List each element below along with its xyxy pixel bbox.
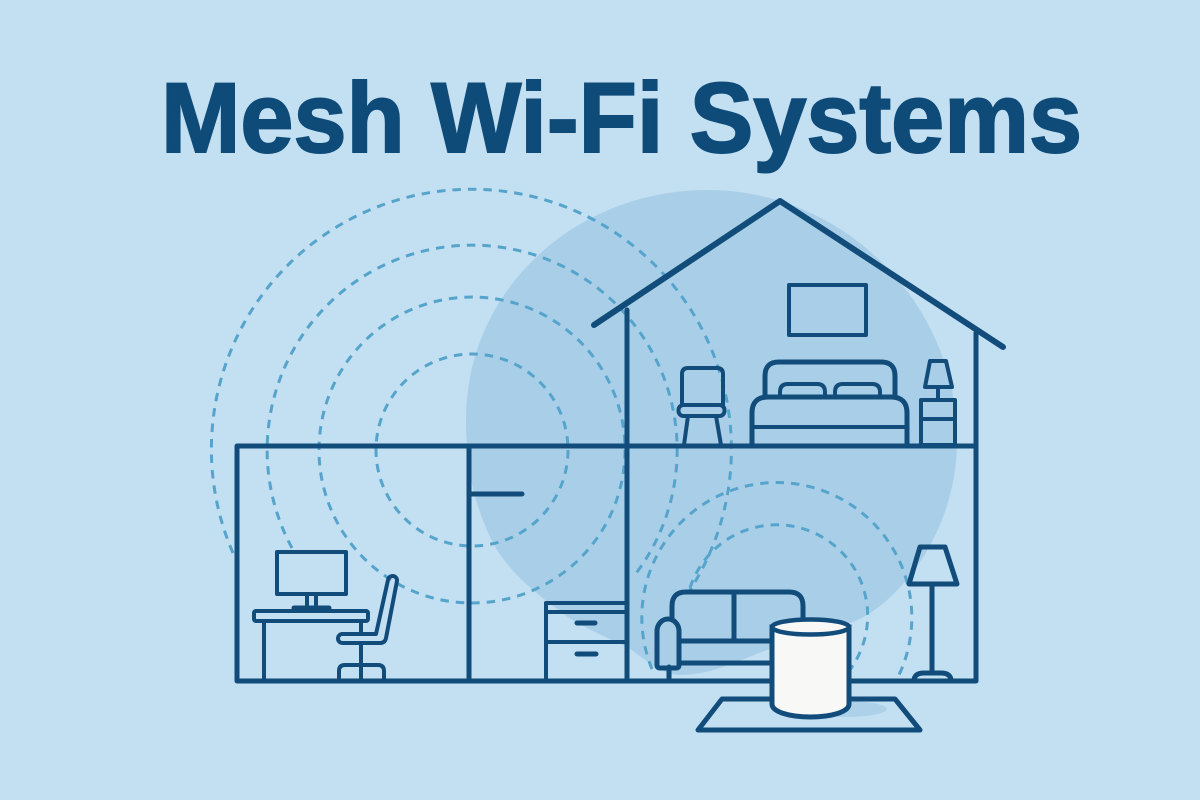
office chair bbox=[338, 576, 397, 681]
signal rings: upstairs left bbox=[211, 189, 731, 603]
bed bbox=[752, 362, 907, 445]
desk with monitor bbox=[254, 552, 368, 681]
mesh router bbox=[772, 620, 849, 717]
signal rings: router bbox=[642, 483, 912, 679]
rug bbox=[698, 699, 920, 730]
chair upstairs bbox=[678, 368, 724, 445]
coverage circle bbox=[466, 190, 957, 675]
title: Mesh Wi-Fi Systems bbox=[161, 62, 1082, 173]
house outline bbox=[237, 201, 1003, 681]
nightstand with lamp bbox=[921, 361, 955, 445]
sofa bbox=[657, 592, 803, 681]
dresser bbox=[546, 603, 627, 681]
picture frame bbox=[789, 285, 866, 335]
floor lamp bbox=[909, 547, 957, 681]
